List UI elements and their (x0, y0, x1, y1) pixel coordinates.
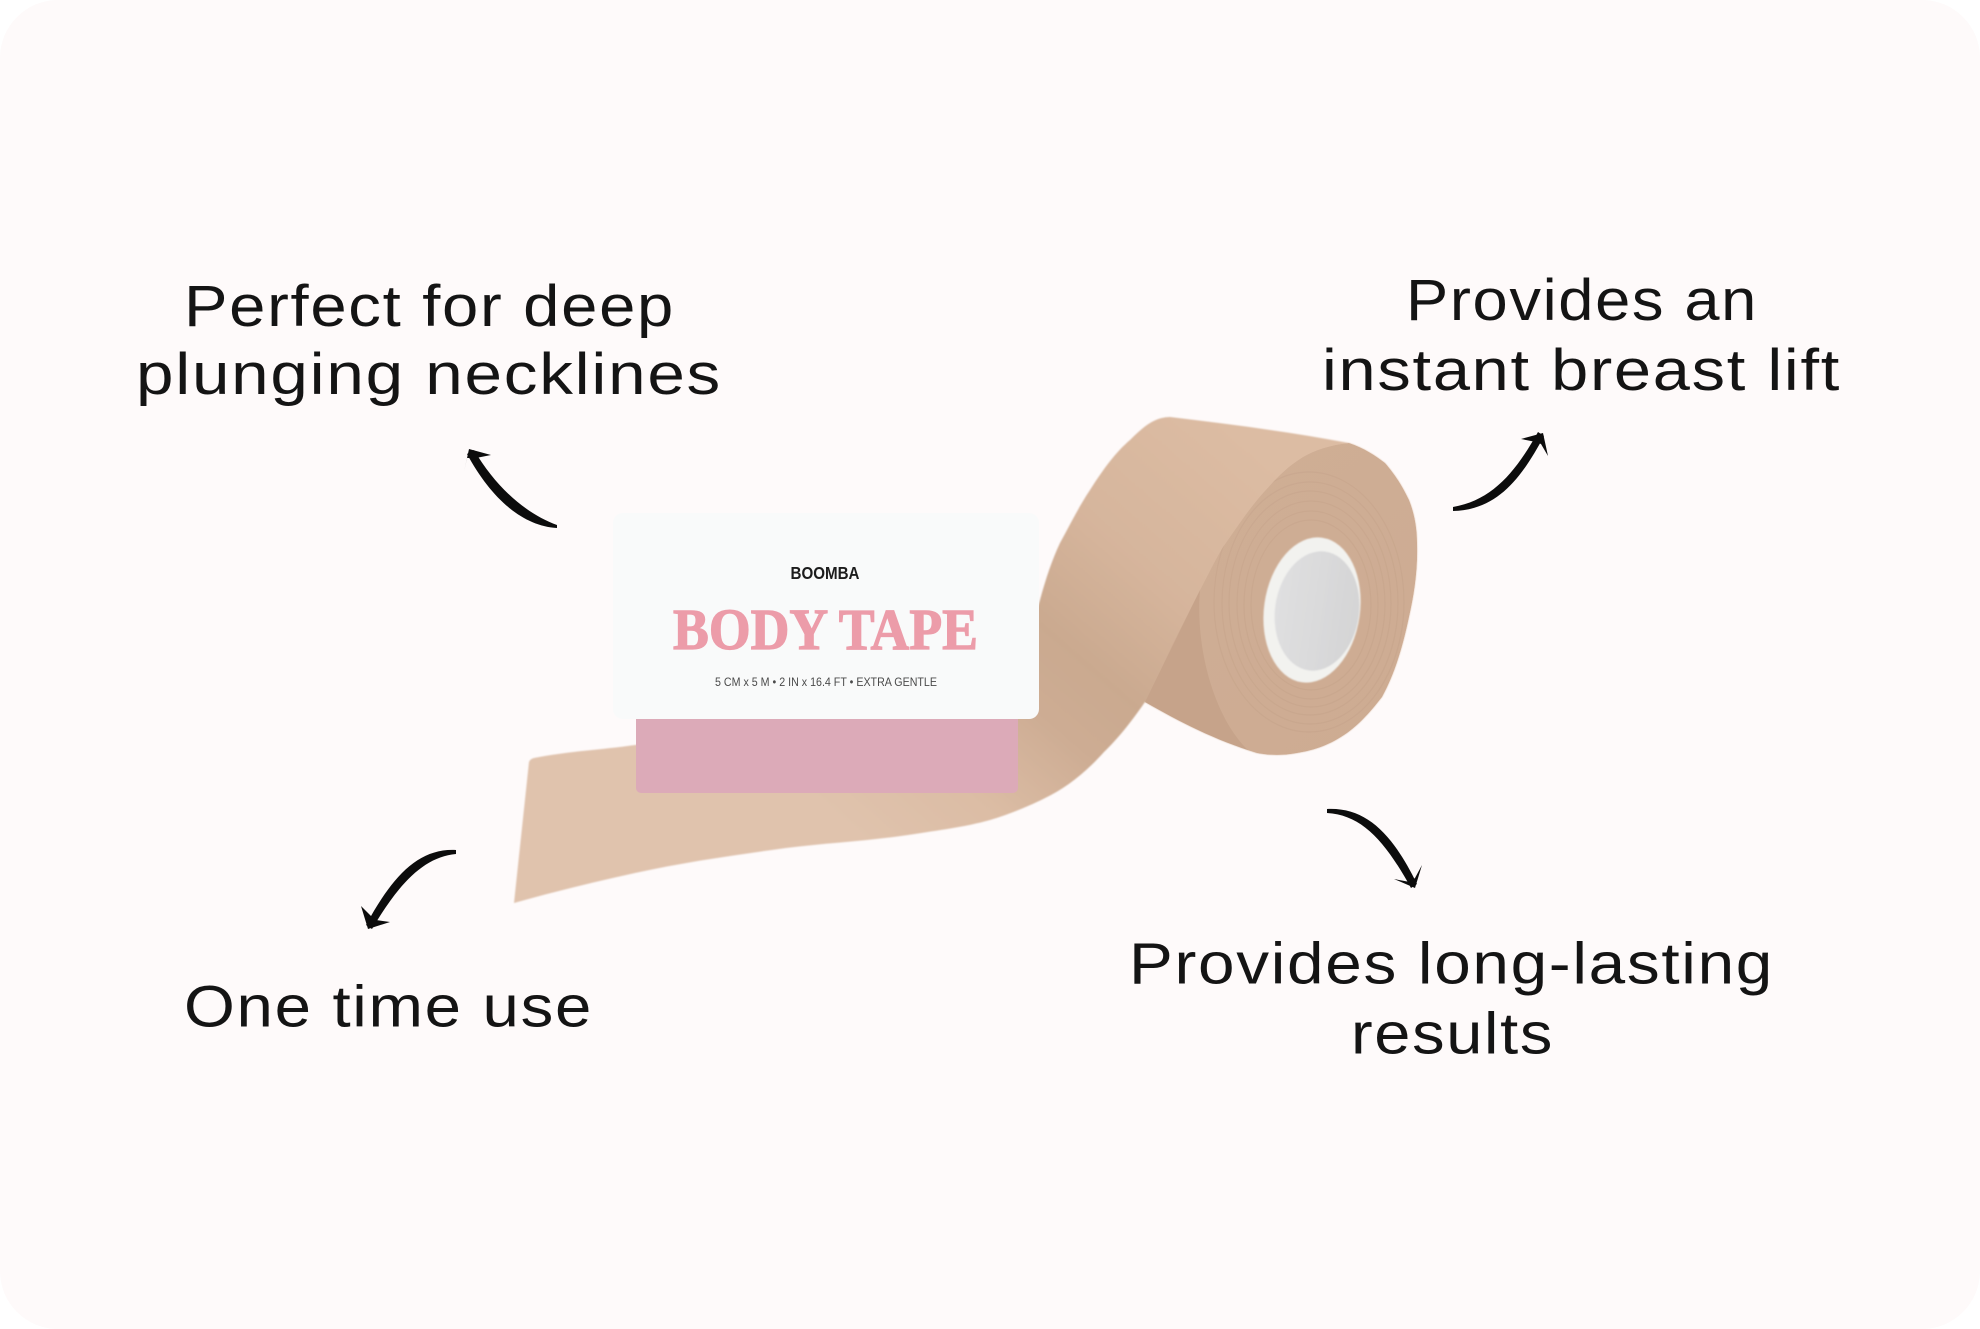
arrow: to one time use callout (361, 850, 456, 929)
product: body tape roll and box (514, 417, 1417, 903)
callout: one time use: One time use (184, 974, 593, 1040)
callout: long-lasting results: Provides long-lasting (1129, 932, 1774, 996)
brand name: BOOMBA (790, 563, 860, 583)
arrow: to long-lasting callout (1327, 809, 1422, 888)
arrow: to breast lift callout (1453, 432, 1548, 511)
callout: instant breast lift: Provides an (1406, 268, 1758, 333)
product title: BODY TAPE (673, 597, 978, 662)
white box label (613, 513, 1039, 719)
tape strip and roll body (514, 417, 1417, 903)
callout: instant breast lift (1322, 268, 1841, 403)
callout: instant breast lift: instant breast lift (1322, 338, 1841, 403)
callout: long-lasting results (1129, 932, 1774, 1066)
arrow: to deep necklines callout (464, 449, 557, 528)
callout: perfect for deep plunging necklines (136, 274, 722, 407)
pink box base (636, 700, 1018, 793)
product size text: 5 CM x 5 M • 2 IN x 16.4 FT • EXTRA GENTLE (715, 675, 937, 689)
roll core (1254, 531, 1370, 689)
callout: perfect for deep plunging necklines: plunging necklines (136, 342, 722, 407)
roll side face (1145, 443, 1417, 755)
callout: perfect for deep plunging necklines: Perfect for deep (184, 274, 675, 339)
callout: long-lasting results: results (1351, 1002, 1554, 1066)
